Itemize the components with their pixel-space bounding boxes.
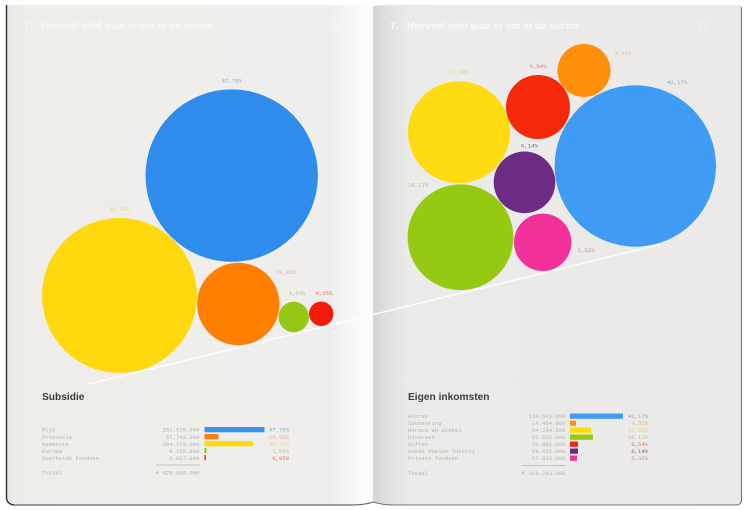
table: eigen inkomsten: 134.643.000 [529,413,566,420]
heading: Eigen inkomsten: Eigen inkomsten [408,392,490,403]
chart: eigen inkomsten circles: 4,51% [615,50,632,57]
table: eigen inkomsten: Goede doelen loterij [408,448,475,455]
panel: right page [373,5,742,505]
table: subsidie: 57,742.000 [166,434,200,441]
heading: Subsidie: Subsidie [42,392,85,403]
chart: subsidie circles: 47,75% [222,78,242,85]
heading: left page title [24,21,342,32]
table: subsidie: 8.155.000 [169,448,200,455]
table: subsidie: 5.007.000 [169,455,200,462]
chart: eigen inkomsten circles: 16,99% [449,69,470,76]
table: eigen inkomsten: 6,14% [631,448,649,455]
table: subsidie: Overheids Fondsen [42,455,99,462]
table: eigen inkomsten: Giften [408,441,428,448]
table: eigen inkomsten: 17.833.000 [532,455,566,462]
table: eigen inkomsten: Totaal [408,470,429,477]
table: eigen inkomsten: 20.882.000 [532,441,566,448]
chart: subsidie circles [42,78,333,373]
chart: subsidie circles: 1,54% [289,290,306,297]
heading: right page title: 77 [697,21,708,32]
table: eigen inkomsten: Diversen [408,434,435,441]
chart: subsidie circles: 10,95% [276,269,297,276]
table: eigen inkomsten: 19.622.000 [532,448,566,455]
table: eigen inkomsten: Sponsoring [408,420,442,427]
table: eigen inkomsten: 6,54% [631,441,649,448]
table: eigen inkomsten: Private fondsen [408,455,458,462]
table: subsidie: Rijk [42,426,56,434]
table: eigen inkomsten: 14.404.000 [532,420,566,427]
table: eigen inkomsten: 16,99% [628,427,649,434]
table: eigen inkomsten: Horeca en winkel [408,427,462,434]
table: eigen inkomsten: 54.234.000 [532,427,566,434]
table: eigen inkomsten: Entree [408,413,428,420]
chart: eigen inkomsten circles: 42,17% [667,79,688,86]
heading: left page title: 7. [24,21,32,32]
table: subsidie: Totaal [42,470,63,476]
table: eigen inkomsten: 18,11% [628,434,649,441]
table: eigen inkomsten: € 319.243.000 [522,470,566,477]
table: subsidie: 38,79% [269,441,290,448]
chart: subsidie circles: 38,79% [109,206,130,213]
heading: left page title: 76 [331,21,342,32]
chart: eigen inkomsten circles: 5,32% [578,247,595,254]
table: subsidie: 0,95% [272,455,290,462]
table: subsidie: Europa [42,448,63,455]
chart: subsidie circles: 0,95% [316,290,333,297]
table: subsidie: 251.626.000 [163,426,200,434]
table: subsidie: Gemeente [42,441,69,448]
table: subsidie: 10,95% [269,434,290,441]
table: subsidie: 1,54% [272,448,290,455]
panel: left page [6,5,373,505]
table: subsidie: Provincie [42,434,72,441]
heading: right page title: Hoeveel geld gaat er om in de sector [407,21,579,32]
heading: left page title: Hoeveel geld gaat er om in de sector [41,21,213,32]
chart: eigen inkomsten circles: 18,11% [408,181,429,188]
heading: right page title [390,21,708,32]
table: eigen inkomsten: 4,51% [631,420,649,427]
chart: eigen inkomsten circles [408,44,716,290]
heading: right page title: 7. [390,21,398,32]
table: eigen inkomsten: 57.826.000 [532,434,566,441]
table: subsidie: 204.379.000 [163,441,200,448]
table: subsidie [42,426,290,476]
table: eigen inkomsten: 5,32% [631,455,649,462]
chart: eigen inkomsten circles: 6,54% [530,63,547,70]
slope line [87,244,660,384]
table: eigen inkomsten: 42,17% [628,413,649,420]
table: subsidie: € 526.909.000 [156,470,200,476]
table: subsidie: 47,75% [269,426,290,434]
chart: eigen inkomsten circles: 6,14% [521,142,538,149]
table: eigen inkomsten [408,413,649,477]
